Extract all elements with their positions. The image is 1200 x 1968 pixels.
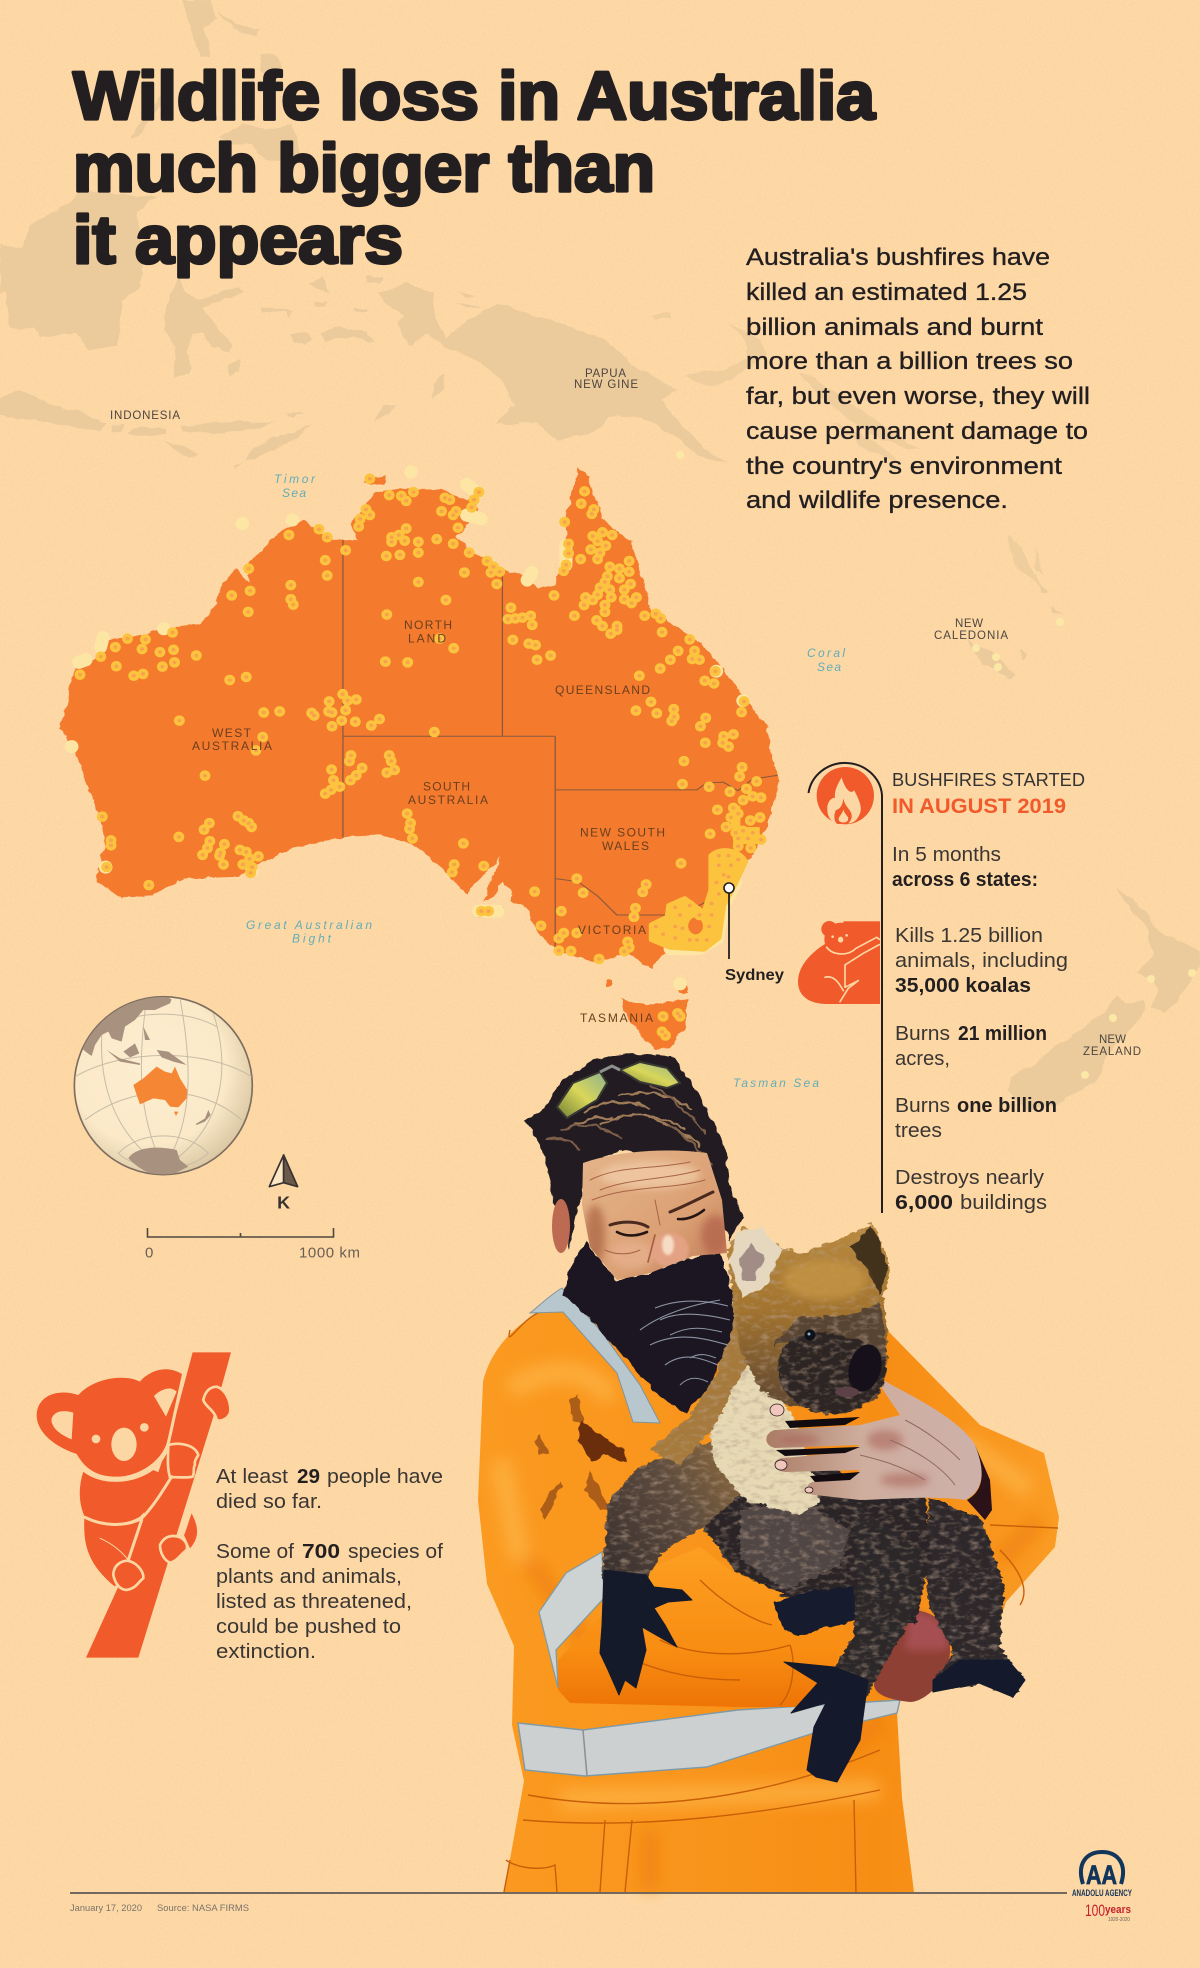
neighbouring country labels: INDONESIA <box>110 410 180 422</box>
map: state labels: WEST <box>212 726 252 740</box>
map: state labels: SOUTH <box>423 780 470 794</box>
north arrow: K <box>277 1192 290 1212</box>
koala text: could be pushed to <box>216 1616 401 1638</box>
bushfire timeline <box>798 763 1085 1214</box>
background map: neighbouring islands <box>0 0 1200 1112</box>
south-east fire area <box>652 850 745 949</box>
neighbouring country labels: ZEALAND <box>1083 1046 1141 1058</box>
koala text: extinction. <box>216 1641 316 1663</box>
second hand <box>874 1610 950 1702</box>
koala text: Some of <box>216 1541 294 1563</box>
footer: date and source: January 17, 2020 <box>70 1903 142 1914</box>
suit seams and folds <box>504 1312 1058 1892</box>
bushfire timeline: animals, including <box>895 950 1068 972</box>
right ear and head <box>37 1369 183 1477</box>
map: state labels: AUSTRALIA <box>408 793 488 807</box>
bushfire timeline: across 6 states: <box>892 869 1038 891</box>
orange suit <box>478 1295 1059 1892</box>
koala text: listed as threatened, <box>216 1591 412 1613</box>
body <box>80 1470 168 1524</box>
title: Wildlife loss in Australia <box>73 58 876 134</box>
Anadolu Agency logo: years <box>1105 1904 1131 1916</box>
statistics: Kills 1.25 billion <box>895 925 1043 947</box>
trunk <box>86 1352 231 1658</box>
timeline rule and arc <box>808 763 882 1213</box>
period: In 5 months <box>892 844 1001 866</box>
map: state labels: NEW SOUTH <box>580 826 665 840</box>
koala chest <box>650 1300 820 1515</box>
koala front leg <box>818 1503 925 1710</box>
koala text: At least <box>216 1466 288 1488</box>
map: state labels: AUSTRALIA <box>192 739 272 753</box>
neighbouring country labels: PAPUA <box>585 368 626 380</box>
intro text: billion animals and burnt <box>746 314 1043 341</box>
map: state labels: TASMANIA <box>580 1011 653 1025</box>
bushfire timeline: Burns <box>895 1095 950 1117</box>
sea labels: Timor <box>274 472 316 486</box>
koala text: died so far. <box>216 1491 322 1513</box>
intro text: cause permanent damage to <box>746 418 1088 445</box>
map: state labels: QUEENSLAND <box>555 683 650 697</box>
intro text: killed an estimated 1.25 <box>746 279 1027 306</box>
title <box>73 58 876 278</box>
koala nose and eye <box>804 1330 887 1397</box>
neighbouring country labels: NEW GINE <box>574 379 638 391</box>
scale bar: 1000 km <box>299 1244 360 1262</box>
locator globe <box>73 995 252 1176</box>
intro text: the country's environment <box>746 453 1062 480</box>
man's hair and beard <box>525 1053 743 1413</box>
sea labels: Sea <box>817 660 841 674</box>
icon: flame <box>817 767 874 824</box>
face <box>92 1423 149 1461</box>
map: state labels <box>192 618 665 1025</box>
sea labels: Great Australian <box>246 918 372 932</box>
koala ears <box>730 1226 888 1298</box>
Sydney marker: Sydney <box>725 967 784 984</box>
intro text: far, but even worse, they will <box>746 383 1090 410</box>
neighbouring country labels: NEW <box>955 618 983 630</box>
coastal halo <box>72 472 743 984</box>
footer: date and source: Source: NASA FIRMS <box>157 1903 249 1914</box>
title: much bigger than <box>73 130 655 206</box>
sea labels <box>246 472 845 1090</box>
hand <box>766 1377 992 1520</box>
koala text: plants and animals, <box>216 1566 402 1588</box>
koala front paw <box>784 1660 1025 1782</box>
rolled sleeve <box>558 1547 845 1707</box>
shoulder stains <box>535 1395 628 1520</box>
heading: BUSHFIRES STARTED <box>892 769 1085 790</box>
landmass <box>59 467 779 1049</box>
arm and paws <box>113 1387 230 1590</box>
koala text: 700 <box>302 1541 340 1563</box>
koala paw on sleeve <box>772 1587 857 1637</box>
neighbouring country labels: CALEDONIA <box>934 630 1008 642</box>
beard grey streaks <box>640 1300 730 1385</box>
face <box>582 1150 727 1280</box>
neighbouring country labels <box>110 368 1141 1058</box>
pale fire dots on islands <box>676 451 1196 1079</box>
bushfire timeline: trees <box>895 1120 942 1142</box>
icon: koala on square <box>798 921 880 1004</box>
koala text: people have <box>327 1466 443 1488</box>
map: Australia with fire dots <box>59 467 779 1049</box>
map: state labels: NORTH <box>404 618 452 632</box>
photo: firefighter holding koala <box>478 1053 1059 1892</box>
koala back leg and torso <box>700 1440 1025 1697</box>
koala head <box>727 1223 890 1413</box>
koala left arm <box>602 1435 745 1650</box>
Anadolu Agency logo: 100 <box>1085 1901 1105 1920</box>
ear <box>552 1199 570 1253</box>
scale bar: 0 <box>145 1244 153 1262</box>
neighbouring country labels: NEW <box>1099 1034 1126 1046</box>
collar <box>530 1288 660 1423</box>
waist reflective band <box>518 1700 900 1776</box>
sea labels: Coral <box>807 646 845 660</box>
koala text: 29 <box>297 1466 320 1488</box>
koala text: species of <box>348 1541 443 1563</box>
bushfire timeline: 21 million <box>958 1023 1047 1045</box>
bushfire timeline: 35,000 koalas <box>895 975 1031 997</box>
bushfire timeline: one billion <box>957 1095 1057 1117</box>
map: state labels: VICTORIA <box>578 923 646 937</box>
sea labels: Tasman Sea <box>733 1076 819 1090</box>
koala face <box>772 1302 888 1414</box>
state borders <box>343 540 778 949</box>
bushfire timeline: 6,000 <box>895 1192 953 1214</box>
intro text: more than a billion trees so <box>746 348 1073 375</box>
sea labels: Sea <box>282 486 306 500</box>
fire dots <box>80 479 761 1036</box>
koala left paw and claws <box>600 1570 692 1695</box>
map: state labels: WALES <box>602 839 649 853</box>
koala gold crown <box>783 1260 867 1300</box>
Anadolu Agency logo: ANADOLU AGENCY <box>1072 1888 1132 1899</box>
Anadolu Agency logo <box>1072 1852 1132 1923</box>
bushfire timeline: Burns <box>895 1023 950 1045</box>
map: state labels: LAND <box>408 632 446 646</box>
scale bar <box>145 1228 360 1262</box>
sea labels: Bight <box>292 932 332 946</box>
title: it appears <box>73 202 403 278</box>
intro text: Australia's bushfires have <box>746 244 1050 271</box>
bushfire timeline: IN AUGUST 2019 <box>892 795 1066 818</box>
north arrow <box>269 1155 298 1212</box>
suit shading <box>500 1372 1040 1890</box>
icon: large koala on tree <box>37 1352 231 1658</box>
sleeve reflective band <box>539 1552 604 1688</box>
intro text <box>746 244 1090 514</box>
intro text: and wildlife presence. <box>746 487 1008 514</box>
bushfire timeline: acres, <box>895 1048 950 1070</box>
footer rule <box>70 1892 1067 1894</box>
bushfire timeline: buildings <box>960 1192 1047 1214</box>
koala text <box>216 1466 443 1663</box>
Anadolu Agency logo: AA <box>1086 1860 1117 1890</box>
Sydney marker <box>724 883 784 984</box>
sunglasses <box>557 1062 680 1118</box>
Anadolu Agency logo: 1920-2020 <box>1108 1917 1130 1923</box>
bushfire timeline: Destroys nearly <box>895 1167 1044 1189</box>
footer: date and source <box>70 1903 249 1914</box>
